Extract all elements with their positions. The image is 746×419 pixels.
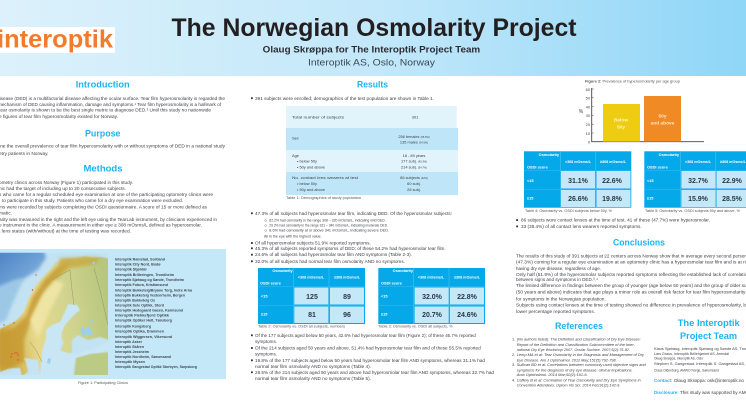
national borders [30,268,108,362]
table 4: below 50y: <15 [527,178,534,183]
text block: conclusions: for symptoms in the Norwegian population. [516,296,606,302]
references list [512,337,646,388]
list of clinics: Interoptik Optiker Holt, Tønsberg [115,318,173,323]
table 5: 50y and above: 32.7% [688,178,709,185]
references list: Eye Disease. Am J Ophthalmol. 2011 May;151(5):792-798. [517,357,617,362]
text block: introduction: tear osmolarity is shown to be the best single metric to diagnose DED.² Until this study no nationwide [0,108,212,113]
table 2: numbers: Osmolarity [272,268,294,273]
references list: Convention Attendees. Optom Vis Sci. 2014 Feb;91(2):142-9. [517,383,620,388]
text block: conclusions: lower percentage reported symptoms. [516,309,595,314]
text block: methods: arity was measured in the right and the left eye using the TearLab instrument, by clinicians experienced in [0,217,218,222]
table 2: numbers: <308 mOsms/L [298,275,325,279]
table 1: demographics: 18 - 89 years [403,153,425,158]
table 4: below 50y: <308 mOsms/L [565,160,592,164]
table 3: percentages: 20.7% [422,312,443,319]
table 3: percentages [378,268,485,324]
results bullets: overall prevalence: o [264,218,267,223]
table 1: demographics: • below 50y [297,181,317,186]
results bullets: overall prevalence: 24.6% of all subjects had hyperosmolar tear film AND symptoms (Table 2-3). [255,252,412,257]
text block: introduction: disease (DED) is a multifactorial disease affecting the ocular surface. Tear film hyperosmolarity is regarded the [0,96,226,101]
text block: conclusions: (50 years and above) indicates that age plays a minor role as overall risk factor for tear film hyperosmolarity as well as [516,290,746,294]
list of clinics: Interoptik Jessheim [115,349,149,354]
text block: methods: t lens status (with/without) at the time of testing was recorded. [0,228,131,234]
table 1: demographics: 256 females (65.5%) [398,134,430,139]
table 4: below 50y: ≥308 mOsms/L [600,160,627,164]
results bullets: contact lenses: 86 subjects wore contact lenses at the time of test. 41 of these (47.7%) were hyperosmolar. [521,218,710,222]
table 1: demographics: • 50y and above [297,187,325,192]
header banner [0,0,746,76]
table 1: demographics: 135 males (34.5%) [400,140,428,144]
text block: purpose: etry patients in Norway. [0,151,48,156]
y axis labels: 30 [586,113,591,118]
results bullets: contact lenses: 33 (38.4%) of all contact lens wearers reported symptoms. [521,224,642,229]
table 2: numbers: OSDI score [260,280,282,286]
bar: 50y and above [644,96,681,142]
caption: table 4: Table 4: Osmolarity vs. OSDI subjects below 50y, % [525,209,613,213]
list of clinics [115,257,198,369]
results bullets: overall prevalence: 47.3% of all subjects had hyperosmolar tear film, indicating DED. Of the hyperosmolar subjects: [255,211,452,216]
references list: Sullivan BD et al: Correlations between commonly used objective signs and [517,362,646,367]
list of clinics: Interoptik Asker [115,339,142,344]
panel: participating clinics [0,249,226,379]
results bullets: overall prevalence: o [264,228,267,233]
results bullets: age groups: symptoms. [255,339,277,344]
list of clinics: Interoptik Nordheim, Sørumsand [115,354,172,359]
table 5: 50y and above: <308 mOsms/L [685,160,712,164]
caption: table 5: Table 5: Osmolarity vs. OSDI subjects 50y and above, % [645,209,741,213]
results bullets: age groups [251,333,495,381]
table 4: below 50y: 26.6% [568,196,589,203]
heading: The Interoptik Project Team: Project Team [680,331,737,342]
table 1: demographics [286,106,458,195]
clinic location markers [3,274,37,361]
references list: 3. [512,362,515,367]
table 1: demographics: Sex [292,136,299,140]
table 3: percentages: Osmolarity [393,268,414,273]
affiliation: Interoptik AS, Oslo, Norway [308,58,435,69]
table 3: percentages: 24.6% [457,312,478,319]
list of clinics: Interoptik Brilleringen, Trondheim [115,272,174,277]
references list: Acta Ophthalmol. 2014 Mar;92(2):161-6. [516,372,588,377]
results bullets: overall prevalence: 8.6% had osmolarity at or above 341 mOsms/L, indicating severe DED. [269,228,389,233]
caption: figure 1: Figure 1: Participating Clinics [78,381,128,385]
bar: 50y and above: and above [651,120,675,126]
results bullets: overall prevalence: Of all hyperosmolar subjects 51.9% reported symptoms. [255,240,371,246]
map of Norway [0,250,110,376]
text block: conclusions: having dry eye disease, regardless of age. [516,266,601,271]
y axis labels: % [579,109,584,115]
table 1: demographics: No. contact lens wearers at test [292,175,359,180]
list of clinics: Interoptik Futura, Kristiansund [115,282,169,287]
table 3: percentages: <15 [381,294,388,298]
text block: conclusions: between signs and symptoms in DED.³˒⁴ [516,277,598,282]
table 5: 50y and above [644,151,746,208]
results bullets: overall prevalence: 45.3% of all subjects reported symptoms of DED; of these 54.2% had hyperosmolar tear film. [255,246,446,251]
table 4: below 50y: OSDI score [527,165,549,170]
table 5: 50y and above: 22.9% [722,178,743,185]
text block: introduction: e figures of tear film hyperosmolarity existed for Norway. [0,114,118,119]
text block: introduction [0,96,226,119]
table 5: 50y and above: OSDI score [647,165,669,170]
y axis labels: 20 [586,122,591,127]
table 1: demographics: 214 subj. (54.7%) [401,164,427,170]
list of clinics: Interoptik Kongsberg [115,323,152,328]
table 3: percentages: OSDI score [381,280,403,286]
table 5: 50y and above: ≥15 [647,196,654,201]
table 3: percentages: 32.0% [422,294,443,301]
table 1: demographics: • 50y and above [297,164,325,170]
table 2: numbers: 89 [343,294,351,301]
table 1: demographics: 86 subjects (22%) [400,175,428,180]
text block: methods: to participate in this study. Patients who came for a dry eye examination were excluded. [2,198,183,203]
Gulf of Bothnia [42,304,80,358]
table 2: numbers [258,268,365,324]
list of clinics: Interoptik Hedegaard Gasen, Karmsund [115,308,184,313]
text block: introduction: mechanism of DED causing inflammation, damage and symptoms.¹ Tear film hyperosmolarity is a hallmark of [0,102,222,107]
heading: The Interoptik Project Team: The Interoptik [678,318,740,329]
list of clinics: Interoptik Sjøhaug og Sønde, Trondheim [115,277,184,282]
Scandinavian mountains [0,262,70,368]
table 4: below 50y: 22.6% [602,178,623,185]
caption: table 3: Table 3: Osmolarity vs. OSDI all subjects, % [378,325,453,329]
references list: (No authors listed): The Definition and Classification of Dry Eye Disease: [517,337,641,342]
results bullets: age groups: Of the 214 subjects aged 50 years and above, 51.4% had hyperosmolar tear film and of these 55.5% reported [255,346,481,350]
y axis labels [579,87,591,144]
text block: methods: ms were recorded by subjects completing the OSDI questionnaire. A score of 15 or more defined as [0,204,208,210]
table 4: below 50y: 31.1% [568,178,589,185]
text block: purpose: ine the overall prevalence of tear film hyperosmolarity with or without symptoms of DED in a national study [0,144,226,149]
table 5: 50y and above: <15 [647,178,654,183]
table 2: numbers: ≥308 mOsms/L [334,275,361,279]
table 3: percentages: ≥15 [381,312,388,316]
text block: conclusions: Only half (51.9%) of the hyperosmolar subjects reported symptoms reflecting the established lack of correlation [516,272,746,277]
list of clinics: Interoptik Flekkefjord Optikk [115,313,170,318]
list of clinics: Interoptik Bukketeig Vestenrheim, Bergen [115,293,186,298]
text block: conclusions: Subjects using contact lenses at the time of testing showed no difference in prevalence of hyperosmolarity, but a [516,302,746,308]
table 1: demographics: Age [292,153,299,158]
references list: Report of the Definition and Classification Subcommittee of the Inter- [517,342,636,347]
team members: Claus Oldenburg, AMWO Norge, Sørumsand [654,367,719,372]
text block: methods: nic had the target of including up to 20 consecutive subjects. [0,186,126,191]
list of clinics: Interoptik Bukketeig Os [115,298,155,303]
contact line: Contact: Olaug Skrøppa: osk@interoptik.no [654,378,744,384]
table 5: 50y and above: Osmolarity [659,152,680,157]
table 4: below 50y: Osmolarity [539,152,560,157]
results bullets: contact lenses [516,218,710,229]
results bullets: age groups: normal tear film osmolarity AND no symptoms (Table 4). [255,364,371,369]
results bullets: age groups: 28.5% of the 214 subjects aged 50 years and above had hyperosmolar tear film AND symptoms, whereas 32.7% had [255,370,495,375]
results bullets: age groups: 19.8% of the 177 subjects aged below 50 years had hyperosmolar tear film AND symptoms, whereas 31.1% had [255,358,486,363]
list of clinics: Interoptik Skåren [115,344,145,349]
references list: 4. [512,377,515,382]
results bullets: overall prevalence: 29.2% had osmolarity in the range 321 – 340 mOsms/L, indicating moderate DED. [269,223,388,228]
list of clinics: Interoptik Ramstad, Sortland [115,257,166,262]
table 2: numbers: 125 [306,294,318,301]
references list: 1. [512,337,515,342]
table 1: demographics: Total number of subjects [292,114,344,120]
table 1: demographics: • below 50y [297,158,317,164]
bar: below 50y: Below [614,118,628,124]
list of clinics: Interoptik Sele Optikk, Stord [115,303,165,308]
table 1: demographics: 26 subj. [407,187,421,192]
heading: Purpose: Purpose [85,128,120,140]
list of clinics: Interoptik Mysen [115,359,146,364]
y axis labels: 10 [586,131,591,136]
results bullets: overall prevalence: 62.2% had osmolarity in the range 308 – 320 mOsms/L, indicating mild DED. [269,218,386,223]
references list: symptoms for the diagnosis of dry eye disease: clinical implications. [517,367,633,372]
team members [654,346,746,372]
bar chart: prevalence per age group [579,87,704,144]
logo: Interoptik: interoptik [0,26,113,54]
text block: methods: ometry clinics across Norway (Figure 1) participated in this study. [0,180,133,185]
team members: Olaug Skrøppa, Interoptik AS, Oslo [654,356,703,361]
text block: methods: s who came for a regular scheduled eye examination at one of the participating optometry clinics were [0,192,214,197]
references list: national Dry Eye Workshop 2007. Ocular Surface. 2007;5(2):75-92. [517,347,630,352]
text block: conclusions: The limited difference in findings between the group of younger (age below 50 years) and the group of older subjects [516,283,746,288]
table 3: percentages: 22.8% [457,294,478,301]
Baltic and Gulf of Finland [40,350,70,375]
y axis labels: 60 [586,87,591,92]
bar: below 50y [603,104,640,142]
table 4: below 50y [524,151,631,208]
heading: The Interoptik Project Team [678,318,740,342]
results bullets: age groups: normal tear film osmolarity AND no symptoms (Table 5). [255,376,371,381]
land mass [0,256,110,376]
table 3: percentages: <308 mOsms/L [418,275,445,279]
text block: conclusions [516,254,746,314]
references list: Lemp MA et al: Tear Osmolarity in the Diagnosis and Management of Dry [517,352,645,357]
list of clinics: Interoptik Optika, Drammen [115,328,165,333]
Estonia and Latvia [74,352,110,376]
table 1: demographics: 177 subj. (45.3%) [401,158,427,164]
heading: Introduction: Introduction [76,80,130,90]
bullet: enrolment: 391 subjects were enrolled; demographics of the test population are shown in Table 1. [255,96,434,101]
table 4: below 50y: ≥15 [527,196,534,201]
text block: conclusions: The results of this study of 391 subjects at 22 centers across Norway show that in average every second person [516,254,746,258]
lakes [47,262,95,364]
caption: table 1: Table 1: Demographics of study population [286,196,361,200]
text block: methods: e instrument in the clinic. A measurement in either eye ≥ 308 mOsms/L defined as hyperosmolar. [0,222,202,228]
table 2: numbers: 81 [308,312,316,319]
text block: conclusions: (47.3%) coming for a regular eye examination at an optometry clinic has a hyperosmolar tear film and is at risk of [516,260,746,264]
results bullets: overall prevalence: 32.0% of all subjects had normal tear film osmolarity AND no symptoms. [255,259,405,264]
list of clinics: Interoptik Wiggersen, Vikersund [115,334,173,339]
list of clinics: Interoptik City Nord, Bodø [115,262,161,267]
bar: below 50y: 50y [617,124,625,130]
table 2: numbers: 96 [343,312,351,319]
results bullets: overall prevalence [251,211,452,264]
table 2: numbers: ≥15 [261,312,268,316]
bar: 50y and above: 50y [658,114,667,120]
heading: Conclusions: Conclusions [613,237,665,248]
table 1: demographics: 60 subj. [407,181,421,186]
authors: Olaug Skrøppa for The Interoptik Project Team [263,45,480,56]
table 5: 50y and above: 28.5% [722,196,743,203]
heading: References: References [555,321,603,332]
table 1: demographics: 391 [412,114,418,120]
y axis labels: 0 [588,139,591,144]
table 2: numbers: <15 [261,294,268,298]
table 3: percentages: ≥308 mOsms/L [454,275,481,279]
references list: Caffery B et al: Correlation of Tear Osmolarity and Dry Eye Symptoms in [517,377,641,382]
list of clinics: Interoptik Bukketeig/Bryane Torg, Indre Arna [115,287,193,292]
references list: 2. [512,352,515,357]
team members: Lars Graus, Interoptik Brillehjørnet AS, Arendal [654,351,729,356]
table 5: 50y and above: ≥308 mOsms/L [720,160,746,164]
list of clinics: Interoptik Gangestad Optikk Storbyen, Sarpsborg [115,364,198,369]
text block: methods [0,180,218,234]
results bullets: overall prevalence: o [264,223,267,228]
y axis labels: 50 [586,96,591,101]
results bullets: age groups: Of the 177 subjects aged below 50 years, 42.6% had hyperosmolar tear film (Figure 2); of these 46.7% reported [255,333,476,338]
table 4: below 50y: 19.8% [602,196,623,203]
caption: figure 2: Figure 2: Prevalence of hyperosmolarity per age group [585,80,680,84]
text block: purpose [0,144,226,156]
heading: Results: Results [357,80,388,90]
caption: table 2: Table 2: Osmolarity vs. OSDI all subjects, numbers [258,325,345,329]
results bullets: age groups: symptoms. [255,352,277,356]
y axis labels: 40 [586,104,591,109]
table 5: 50y and above: 15.9% [688,196,709,203]
results bullets: overall prevalence: All in the eye with the highest value. [264,234,322,239]
list of clinics: Interoptik Stjørdal [115,267,146,272]
heading: Methods: Methods [84,164,122,175]
title: The Norwegian Osmolarity Project [172,14,577,42]
